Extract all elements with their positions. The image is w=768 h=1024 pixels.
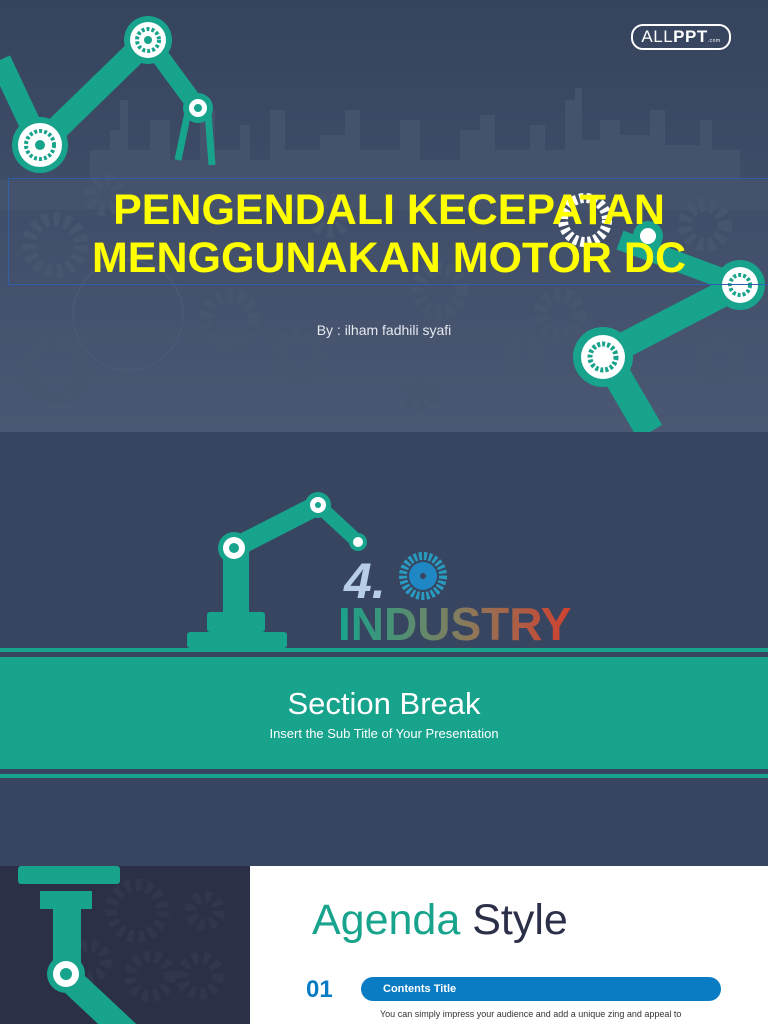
slide 3: agenda	[0, 866, 768, 1024]
logo: ALLPPT	[631, 24, 731, 50]
section title: Section Break	[288, 686, 480, 721]
agenda heading: Agenda Style	[312, 896, 568, 944]
title box: MENGGUNAKAN MOTOR DC	[92, 234, 686, 282]
industry 4.0 illustration: INDUSTRY	[338, 598, 571, 650]
subtitle: Insert the Sub Title of Your Presentation	[269, 726, 499, 741]
background skyline and gears	[85, 88, 712, 194]
title box	[8, 178, 768, 285]
industry 4.0 illustration: 4.	[343, 553, 386, 609]
item 01	[306, 976, 721, 1019]
left dark panel with arm	[0, 866, 250, 1024]
title box: PENGENDALI KECEPATAN	[113, 186, 665, 234]
slide 2: section break	[0, 432, 768, 866]
robot arm right	[558, 193, 765, 432]
slide 1: title slide	[0, 0, 768, 432]
item 01: You can simply impress your audience and add a unique zing and appeal to	[380, 1009, 681, 1019]
industry 4.0 illustration	[187, 492, 571, 650]
author: By : ilham fadhili syafi	[317, 322, 451, 338]
robot arm top left	[0, 16, 216, 173]
teal band	[0, 648, 768, 778]
item 01: 01	[306, 976, 333, 1003]
item 01: Contents Title	[383, 983, 456, 995]
logo: ALLPPT: ALLPPT.com	[641, 27, 721, 46]
